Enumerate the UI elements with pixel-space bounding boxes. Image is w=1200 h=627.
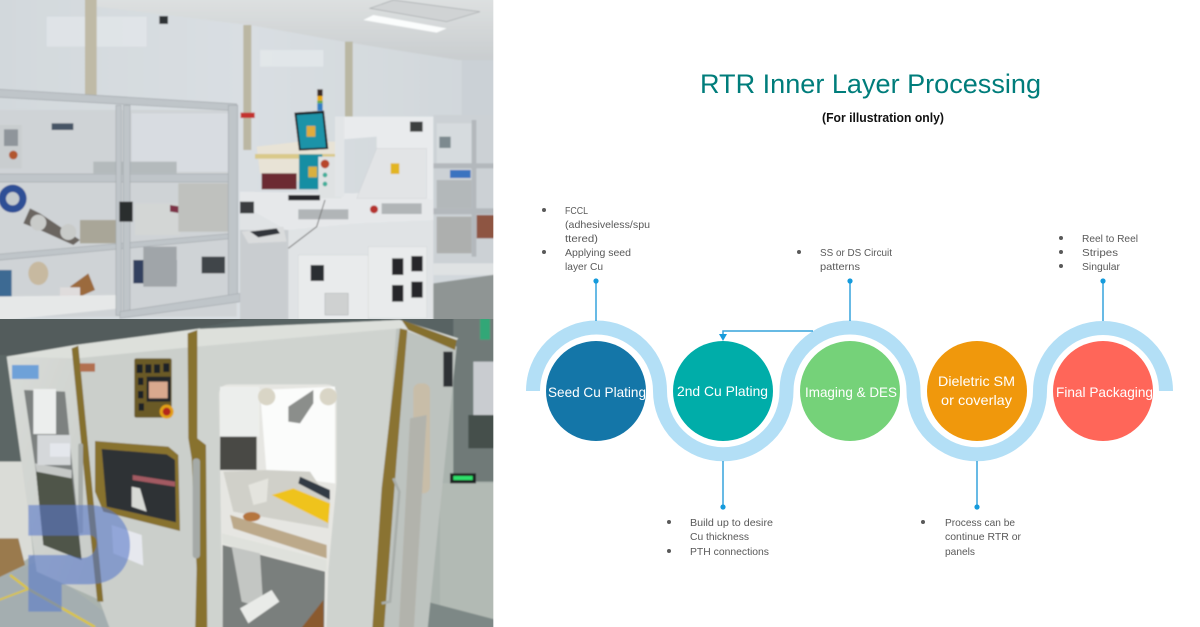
notes: final packaging: [1059, 233, 1138, 273]
connector: 2nd Cu plating: [720, 461, 726, 510]
notes: imaging: SS or DS Circuit: [820, 247, 892, 259]
notes: seed Cu plating: (adhesiveless/spu: [565, 219, 650, 231]
notes: seed Cu plating: [542, 206, 650, 273]
notes: dielectric: continue RTR or: [945, 531, 1021, 543]
notes: seed Cu plating: Applying seed: [565, 247, 631, 259]
connector: dielectric: [974, 461, 980, 510]
step 3: imaging and DES: Imaging & DES: [805, 384, 897, 400]
notes: imaging: patterns: [820, 261, 860, 273]
step 4: dielectric SM or coverlay: or coverlay: [941, 392, 1012, 408]
title: RTR Inner Layer Processing: [700, 69, 1041, 99]
step 4: dielectric SM or coverlay: Dieletric SM: [938, 373, 1015, 389]
step 3: imaging and DES: [800, 341, 900, 441]
connector: imaging and DES: [847, 278, 853, 321]
notes: seed Cu plating: layer Cu: [565, 261, 603, 273]
notes: final packaging: Stripes: [1082, 247, 1118, 259]
step 5: final packaging: Final Packaging: [1056, 384, 1153, 400]
notes: final packaging: Reel to Reel: [1082, 233, 1138, 245]
notes: dielectric: panels: [945, 546, 975, 558]
arrow: imaging loops back to 2nd Cu plating: [719, 331, 813, 341]
notes: dielectric: Process can be: [945, 517, 1015, 529]
notes: seed Cu plating: FCCL: [565, 206, 588, 217]
step 4: dielectric SM or coverlay: [927, 341, 1027, 441]
notes: 2nd Cu plating: Cu thickness: [690, 531, 749, 543]
step 1: seed Cu plating: Seed Cu Plating: [548, 384, 646, 400]
notes: dielectric: [921, 517, 1021, 558]
step 2: 2nd Cu plating: [673, 341, 773, 441]
photo: roll-to-roll plating line: [0, 308, 503, 627]
notes: 2nd Cu plating: PTH connections: [690, 546, 769, 558]
process ribbon: [533, 328, 1166, 454]
photo: clean-room RTR machines: [0, 0, 503, 330]
connector: final packaging: [1100, 278, 1106, 321]
notes: 2nd Cu plating: Build up to desire: [690, 517, 773, 529]
step 1: seed Cu plating: [546, 341, 646, 441]
subtitle: (For illustration only): [822, 111, 944, 125]
notes: imaging: [797, 247, 892, 273]
notes: 2nd Cu plating: [667, 517, 773, 558]
step 5: final packaging: [1053, 341, 1153, 441]
notes: final packaging: Singular: [1082, 261, 1120, 273]
connector: seed Cu plating: [593, 278, 599, 321]
step 2: 2nd Cu plating: 2nd Cu Plating: [677, 383, 768, 399]
notes: seed Cu plating: ttered): [565, 233, 598, 245]
